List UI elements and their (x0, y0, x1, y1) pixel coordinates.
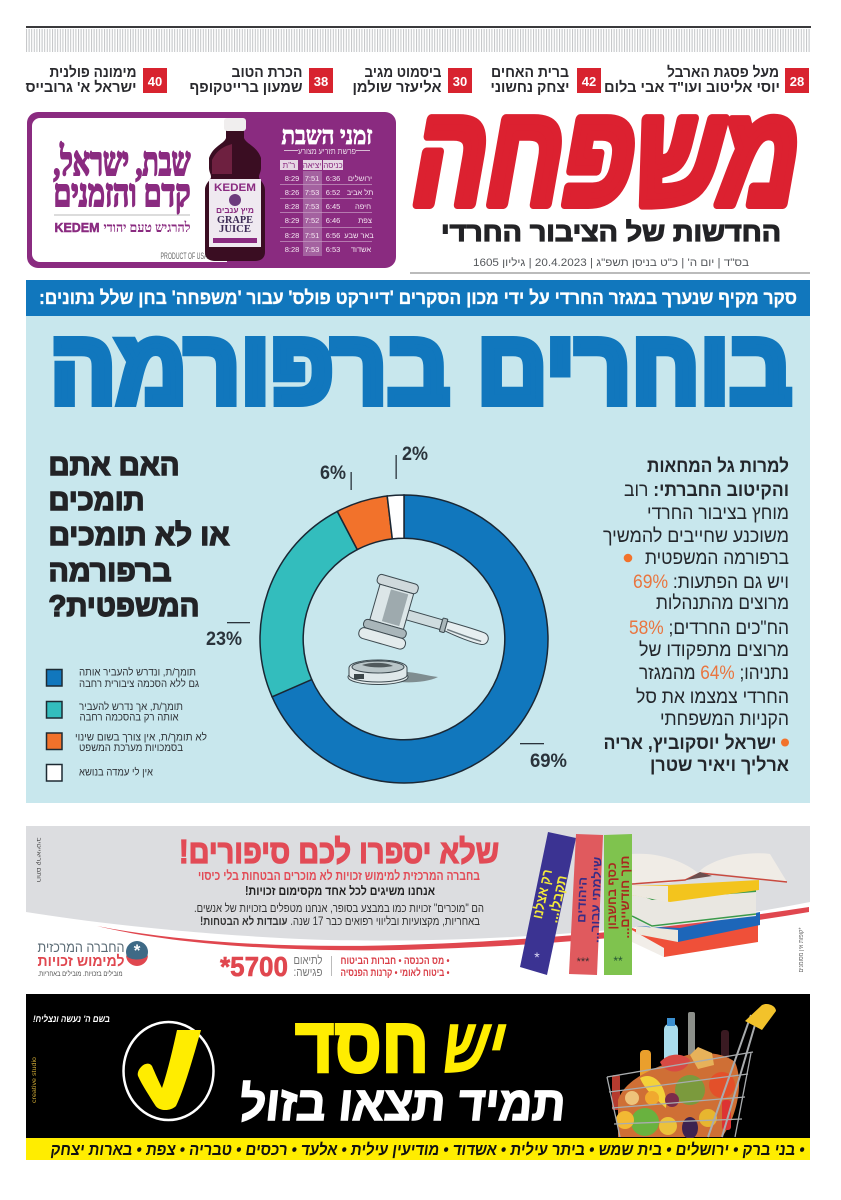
Shabbat times table: 7:52 (305, 216, 319, 225)
Shabbat times table: ר"ת (283, 161, 295, 170)
article text: והקיטוב החברתי: רוב (624, 480, 789, 501)
book: blue spine: תקבלו... (544, 874, 570, 924)
book: green spine: תוך חודשיים... (618, 856, 632, 938)
teaser: page 40 (26, 64, 167, 96)
leader and label: 2% (396, 444, 428, 479)
company logo (38, 939, 148, 978)
Shabbat times table: 7:53 (305, 245, 319, 254)
Shabbat times table: 6:36 (326, 174, 340, 183)
article text (603, 456, 789, 776)
book: blue spine (520, 832, 576, 975)
Shabbat times table: 6:52 (326, 188, 340, 197)
stack: red book (632, 925, 758, 957)
Shabbat times table: צפת (358, 216, 372, 225)
agency credit: creative studio (32, 1056, 38, 1103)
book: green spine (604, 834, 632, 975)
article text: נתניהו; 64% מהמגזר (639, 663, 789, 684)
question heading: או לא תומכים (48, 519, 230, 552)
ad body text: באחריות, מקצועיות ובליווי רפואים כבר 17 שנה. עובדות לא הבטחות! (200, 915, 480, 928)
service list (340, 955, 450, 979)
stack: green book (632, 890, 756, 928)
article text: ויש גם הפתעות: 69% (633, 572, 789, 593)
Shabbat times table: 8:26 (285, 188, 299, 197)
company logo: למימוש זכויות (38, 953, 124, 970)
Shabbat times table: 7:53 (305, 202, 319, 211)
article text: מרוצים מהתנהלות (656, 593, 789, 614)
ad slogan: שבת, ישראל, (54, 139, 191, 184)
teaser: page 30: ביסמוט מגיב (364, 64, 442, 81)
Shabbat times table: 6:56 (326, 231, 340, 240)
service list: • מס הכנסה • חברות הביטוח (340, 955, 450, 967)
Shabbat times table: 8:28 (285, 245, 299, 254)
juice bottle: מיץ ענבים (216, 206, 254, 215)
ad: rights company (26, 826, 810, 982)
leader and label: 23% (206, 622, 250, 650)
legend: no opinion (46, 764, 153, 781)
article text: הח"כים החרדים; 58% (629, 618, 789, 639)
segment: 23% teal (260, 511, 357, 697)
Shabbat times table: כניסה (323, 161, 343, 170)
teaser: page 30 (352, 64, 472, 96)
legend: oppose: לא תומך/ת, אין צורך בשום שינוי (75, 732, 207, 744)
article text: מרוצים מתפקודו של (639, 640, 789, 661)
article text: ארליך ויאיר שטרן (650, 755, 789, 776)
legend: support regardless (46, 666, 200, 690)
book: red spine: *** (577, 956, 590, 968)
Shabbat times table: תל אביב (347, 188, 373, 197)
article text: למרות גל המחאות (647, 456, 789, 477)
juice bottle (205, 118, 265, 261)
ad slogan: להרגיש טעם יהודי (104, 220, 190, 236)
orange bullet (624, 554, 632, 562)
donut chart (260, 495, 548, 783)
book: red spine (569, 834, 605, 975)
leader and label: 2%: 2% (402, 444, 428, 465)
teaser: page 28 (604, 64, 809, 96)
ad subline: בחברה המרכזית למימוש זכויות לא מוכרים הבטחות בלי כיסוי (198, 868, 480, 883)
teasers row (26, 64, 809, 96)
masthead barcode strip (26, 26, 811, 52)
ad slogan: קדם והזמנים (54, 173, 190, 215)
Shabbat times table: 7:51 (305, 231, 319, 240)
ad slogan: PRODUCT OF USA (160, 251, 208, 261)
legend: oppose (46, 732, 207, 754)
teaser: page 38: הכרת הטוב (232, 64, 302, 81)
legend (46, 666, 207, 781)
article text: ברפורמה המשפטית (645, 548, 789, 569)
segment: 69% blue (272, 495, 548, 783)
teaser: page 38: שמעון ברייטקופף (190, 79, 302, 96)
teaser: page 38: 38 (314, 74, 328, 89)
headline: בוחרים ברפורמה (50, 310, 792, 426)
bottles (664, 1024, 678, 1064)
teaser: page 30: 30 (453, 74, 467, 89)
question heading (48, 449, 230, 623)
brand: yesh chesed: יש (433, 1001, 517, 1089)
icon: gavel (348, 573, 497, 684)
legend: no opinion: אין לי עמדה בנושא (79, 766, 153, 778)
question heading: המשפטית? (48, 590, 200, 623)
ad headline: שלא יספרו לכם סיפורים! (179, 833, 499, 870)
legend: support regardless: גם ללא הסכמה ציבורית רחבה (79, 678, 200, 690)
segment: 2% white (387, 495, 404, 539)
Shabbat times table: 8:29 (285, 216, 299, 225)
ad slogan: KEDEM (54, 220, 100, 235)
question heading: ברפורמה (48, 555, 172, 588)
Shabbat times table: יציאה (303, 161, 321, 170)
agency credit: רותם קריאייטיב (35, 838, 41, 882)
teaser: page 28: מעל פסגת הארבל (667, 64, 779, 81)
teaser: page 42: 42 (582, 74, 596, 89)
juice bottle: KEDEM (214, 182, 256, 194)
leader and label: 23%: 23% (206, 629, 242, 650)
leader and label: 69% (520, 743, 567, 772)
Shabbat times table: זמני השבת (282, 123, 373, 150)
teaser: page 42 (490, 64, 601, 96)
teaser: page 40: מימונה פולנית (50, 64, 136, 81)
Shabbat times table: 8:29 (285, 174, 299, 183)
phone number: פגישה: (294, 965, 322, 979)
book: blue spine: רק אצלנו (529, 868, 555, 920)
company logo: החברה המרכזית (38, 939, 124, 955)
Shabbat times table: באר שבע (344, 231, 374, 240)
stack: yellow book (632, 880, 759, 902)
teaser: page 42: ברית האחים (491, 64, 569, 81)
book: red spine: היהודים (574, 877, 590, 923)
Shabbat times table: 7:51 (305, 174, 319, 183)
tagline: החדשות של הציבור החרדי (441, 217, 781, 247)
Shabbat times table: 6:45 (326, 202, 340, 211)
phone number: *5700 (220, 951, 288, 982)
photo credit: *קופות אין מסומנים (798, 927, 805, 972)
ad: Yesh Chesed (26, 994, 810, 1160)
service list: • ביטוח לאומי • קרנות הפנסיה (340, 967, 450, 979)
teaser: page 28: 28 (790, 74, 804, 89)
panel: survey (26, 280, 810, 803)
survey banner (26, 280, 810, 316)
teaser: page 28: יוסי אליטוב ועו"ד אבי בלום (604, 79, 780, 96)
book: green spine: כסף בחשבון (605, 862, 619, 930)
Shabbat times table: ירושלים (348, 174, 372, 183)
slogan: תמיד תצאו בזול (237, 1077, 569, 1131)
ad claim: אנחנו משיגים לכל אחד מקסימום זכויות! (245, 884, 435, 898)
Shabbat times table (280, 123, 374, 256)
stack: blue book (636, 912, 760, 942)
teaser: page 42: יצחק נחשוני (490, 79, 570, 96)
blessing line: בשם ה' נעשה ונצליח! (32, 1014, 111, 1025)
article text: הקניות המשפחתי (660, 709, 789, 730)
legend: oppose: בסמכויות מערכת המשפט (79, 742, 183, 754)
leader and label: 69%: 69% (530, 751, 567, 772)
segment: 6% orange (337, 496, 392, 550)
article text: משוכנע שחייבים להמשיך (603, 526, 789, 547)
issue date line: בס"ד | יום ה' | כ"ט בניסן תשפ"ג | 20.4.2023 | גיליון 1605 (473, 256, 749, 269)
article text: החרדי צמצמו את סל (636, 687, 789, 708)
open book (632, 853, 787, 884)
Shabbat times table: 8:28 (285, 202, 299, 211)
Shabbat times table: 6:46 (326, 216, 340, 225)
teaser: page 40: ישראל א' גרובייס (26, 79, 136, 96)
company logo: מובילים בזכויות. מובילים באחריות. (38, 969, 122, 978)
legend: support with consensus (46, 701, 183, 724)
legend: support with consensus: אותה רק בהסכמה רחבה (80, 712, 179, 724)
company logo: * (134, 941, 141, 960)
Shabbat times table: אשדוד (351, 245, 371, 254)
ad body text (194, 902, 484, 928)
legend: support regardless: תומך/ת, ונדרש להעביר אותה (79, 666, 196, 678)
books (520, 832, 787, 975)
Shabbat times table: 6:53 (326, 245, 340, 254)
juice bottle: JUICE (219, 224, 251, 235)
juice bottle: GRAPE (217, 215, 253, 226)
teaser: page 40: 40 (148, 74, 162, 89)
icon: check mark (124, 1022, 214, 1120)
ad background (26, 826, 810, 941)
teaser: page 38 (190, 64, 333, 96)
question heading: האם אתם (48, 449, 180, 482)
brand: yesh chesed (295, 1001, 517, 1089)
Shabbat times table: חיפה (355, 202, 371, 211)
brand: yesh chesed: חסד (295, 1001, 429, 1089)
legend: support with consensus: תומך/ת, אך נדרש להעביר (79, 701, 183, 713)
orange bullet (781, 738, 789, 746)
ad: Kedem Shabbat times (27, 112, 396, 268)
article text: מוחץ בציבור החרדי (647, 503, 789, 524)
phone number (220, 951, 332, 982)
ad body text: הם "מוכרים" זכויות כמו במבצע בסופר, אנחנו מטפלים בזכויות של אנשים. (194, 902, 484, 915)
Shabbat times table: פרשת תזריע מצורע (298, 147, 356, 156)
question heading: תומכים (48, 484, 144, 517)
ad slogan (54, 139, 208, 261)
leader and label: 6%: 6% (320, 463, 346, 484)
article text: ישראל יוסקוביץ, אריה (604, 733, 776, 754)
book: blue spine: * (534, 949, 540, 965)
teaser: page 30: אליעזר שולמן (352, 79, 442, 96)
cart wires (607, 1015, 757, 1137)
masthead rule (410, 272, 810, 274)
produce (618, 1053, 739, 1137)
leader and label: 6% (320, 463, 352, 490)
cart handle (745, 1004, 776, 1030)
phone number: לתיאום (294, 953, 322, 967)
book: red spine: שילמתי עבור... (588, 856, 605, 943)
Shabbat times table: 7:53 (305, 188, 319, 197)
illustration: shopping cart (607, 1004, 776, 1139)
Shabbat times table: 8:28 (285, 231, 299, 240)
book: green spine: ** (613, 954, 623, 968)
red swoosh (97, 907, 809, 950)
